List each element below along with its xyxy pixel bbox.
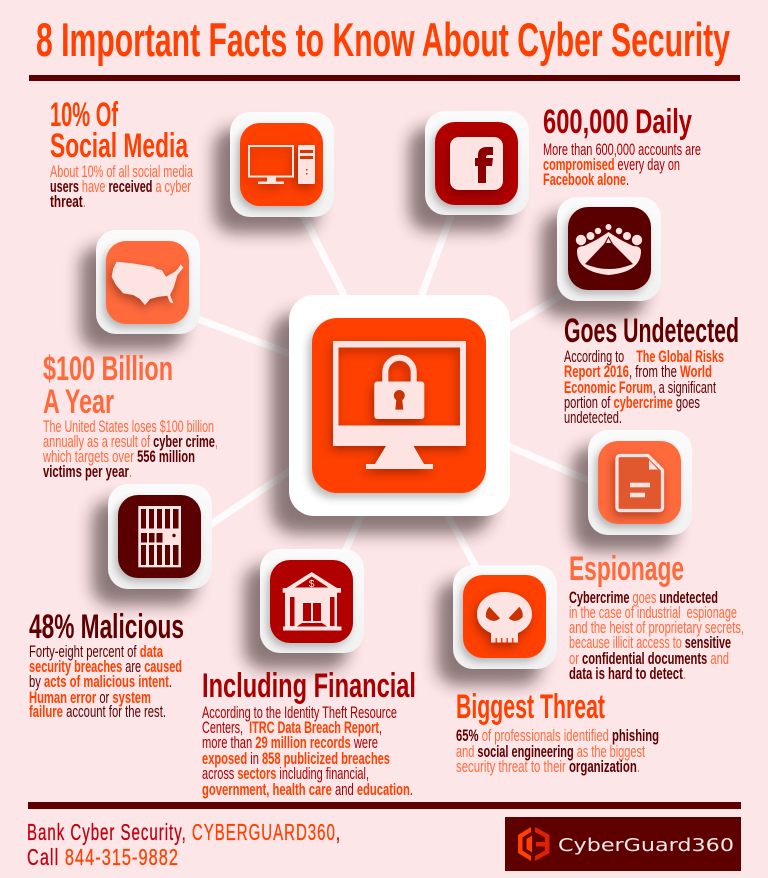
icon: skull bbox=[437, 565, 557, 685]
text block: Facebook alone. bbox=[543, 171, 629, 189]
text block: Report 2016, from the World bbox=[564, 363, 712, 381]
text block bbox=[456, 727, 659, 776]
text block: compromised every day on bbox=[543, 156, 680, 174]
text block: The United States loses $100 billion bbox=[43, 418, 214, 436]
panel: 48% malicious bbox=[29, 608, 184, 721]
text block: data is hard to detect. bbox=[569, 665, 686, 683]
icon: map of the USA bbox=[80, 230, 200, 350]
text block: According to The Global Risks bbox=[564, 348, 724, 366]
heading bbox=[43, 350, 173, 421]
footer contact text: Bank Cyber Security, CYBERGUARD360, bbox=[27, 819, 341, 845]
text block: exposed in 858 publicized breaches bbox=[202, 750, 390, 768]
text block: annually as a result of cyber crime, bbox=[43, 433, 218, 451]
text block: victims per year. bbox=[43, 463, 132, 481]
heading: A Year bbox=[43, 383, 114, 421]
text block: which targets over 556 million bbox=[42, 448, 195, 466]
text block: and social engineering as the biggest bbox=[456, 743, 645, 761]
panel: espionage bbox=[569, 550, 744, 683]
text block: Cybercrime goes undetected bbox=[569, 589, 718, 607]
central icon: monitor with padlock bbox=[271, 295, 510, 534]
icon: document bbox=[572, 430, 692, 551]
text block: portion of cybercrime goes bbox=[564, 394, 700, 412]
heading: 600,000 Daily bbox=[543, 103, 692, 141]
logo: CyberGuard360 bbox=[505, 817, 741, 871]
heading: $100 Billion bbox=[43, 350, 173, 388]
panel: 10% of social media bbox=[50, 96, 194, 211]
text block bbox=[42, 418, 218, 481]
heading: Social Media bbox=[50, 127, 189, 165]
text block: government, health care and education. bbox=[202, 781, 413, 799]
text block: or confidential documents and bbox=[569, 650, 729, 668]
text block bbox=[564, 348, 724, 427]
text block: Forty-eight percent of data bbox=[29, 643, 164, 661]
text block: According to the Identity Theft Resource bbox=[202, 704, 397, 722]
heading: Including Financial bbox=[202, 667, 416, 705]
icon: bank bbox=[244, 549, 364, 669]
heading: Biggest Threat bbox=[456, 688, 605, 726]
text block: security threat to their organization. bbox=[456, 758, 640, 776]
heading bbox=[50, 96, 189, 165]
text block: 65% of professionals identified phishing bbox=[456, 727, 659, 745]
icon: desktop computer bbox=[214, 112, 334, 233]
panel: goes undetected bbox=[564, 312, 739, 427]
text block: more than 29 million records were bbox=[202, 734, 378, 752]
text block: failure account for the rest. bbox=[29, 703, 166, 721]
text block: because illicit access to sensitive bbox=[569, 634, 731, 652]
text block: Human error or system bbox=[29, 689, 151, 707]
text block bbox=[202, 704, 413, 799]
icon: crowd around table bbox=[541, 197, 661, 317]
connector lines bbox=[198, 213, 590, 567]
text block: undetected. bbox=[564, 409, 622, 427]
text block bbox=[50, 163, 194, 211]
panel: $100 billion a year bbox=[42, 350, 218, 481]
text block: by acts of malicious intent. bbox=[29, 673, 172, 691]
text block bbox=[569, 589, 744, 683]
footer contact text: Call 844-315-9882 bbox=[27, 844, 179, 870]
text block: About 10% of all social media bbox=[50, 163, 194, 181]
footer contact text bbox=[27, 819, 341, 870]
icon: jail door bbox=[92, 484, 212, 605]
logo: CyberGuard360: CyberGuard360 bbox=[558, 835, 734, 856]
heading: 10% Of bbox=[50, 96, 118, 134]
text block: across sectors including financial, bbox=[202, 765, 369, 783]
panel: 600,000 daily bbox=[543, 103, 701, 189]
heading: 48% Malicious bbox=[29, 608, 184, 646]
heading: Espionage bbox=[569, 550, 684, 588]
icon: facebook bbox=[409, 111, 529, 231]
text block: security breaches are caused bbox=[29, 658, 182, 676]
text block: Centers, ITRC Data Breach Report, bbox=[202, 719, 382, 737]
panel: biggest threat bbox=[456, 688, 659, 776]
text block: Economic Forum, a significant bbox=[564, 379, 716, 397]
panel: including financial bbox=[202, 667, 416, 799]
text block bbox=[29, 643, 182, 721]
icon: bank: $ bbox=[309, 579, 315, 590]
text block: users have received a cyber bbox=[50, 178, 191, 196]
text block: threat. bbox=[50, 193, 86, 211]
text block bbox=[543, 141, 701, 189]
